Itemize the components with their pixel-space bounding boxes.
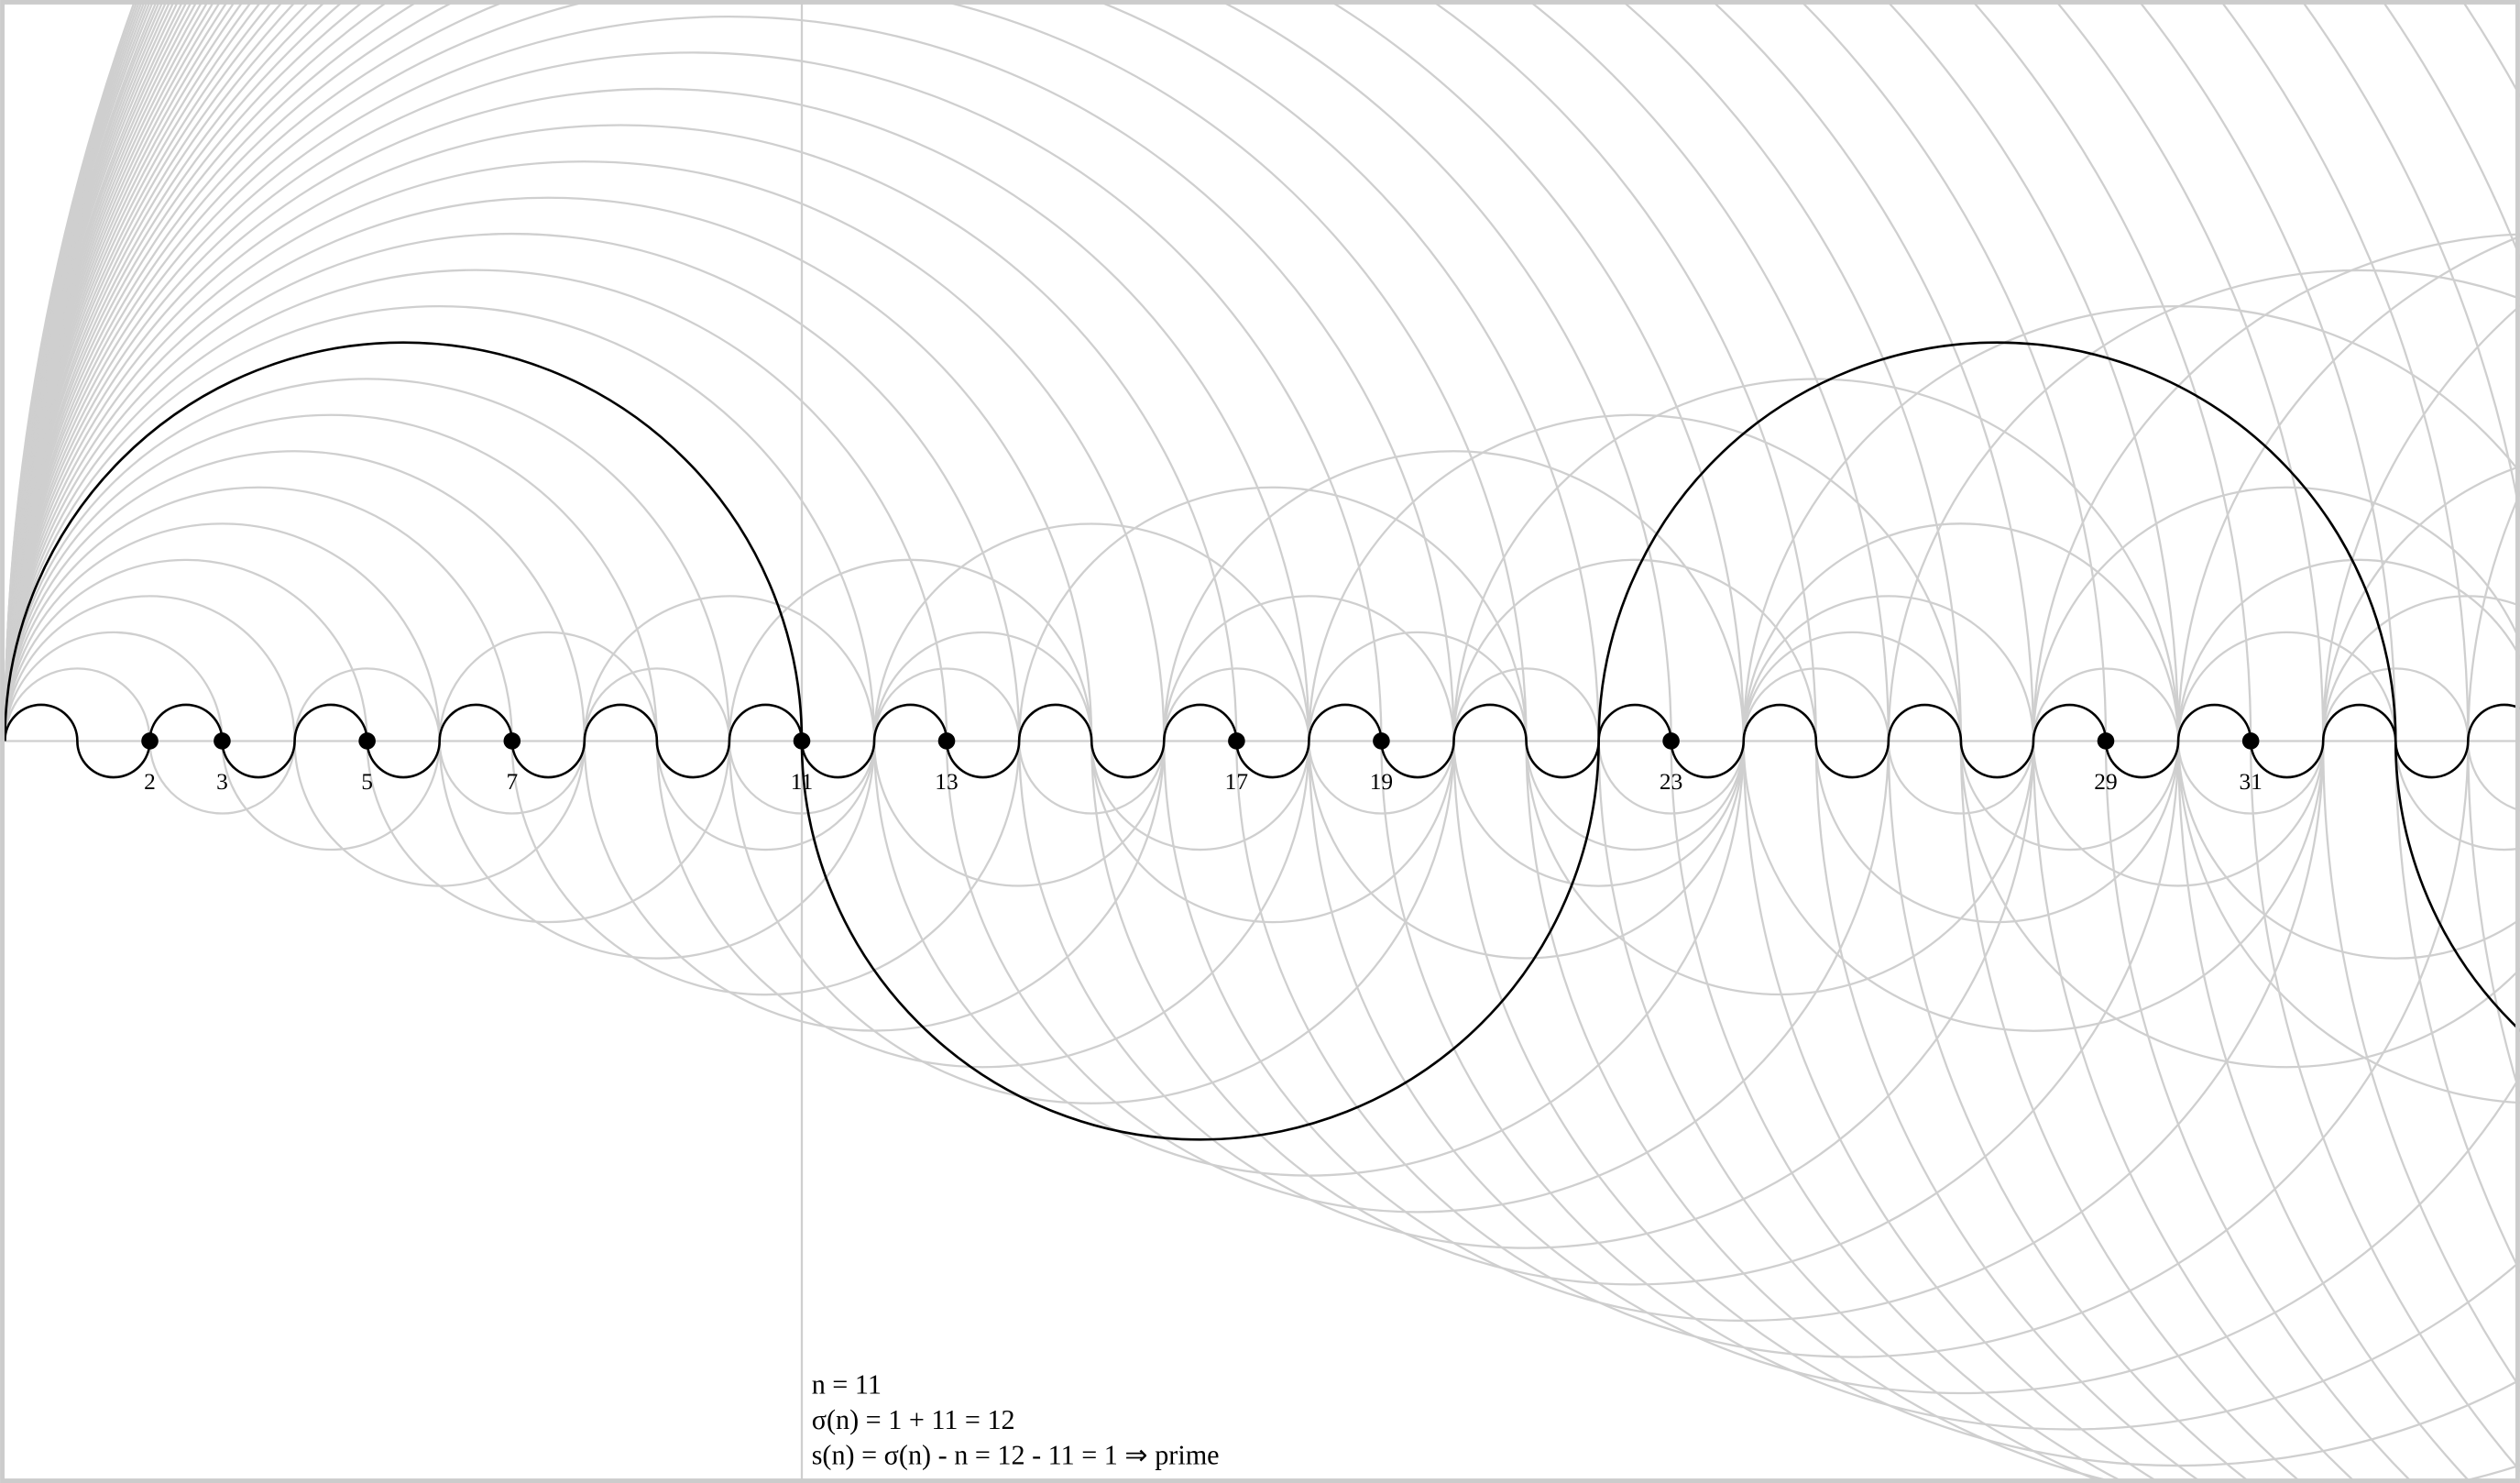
prime labels: 17 <box>1225 769 1248 795</box>
prime labels: 3 <box>216 769 228 795</box>
prime labels: 23 <box>1660 769 1682 795</box>
prime labels: 19 <box>1370 769 1393 795</box>
info text block <box>812 1368 1220 1471</box>
vertical marker at n = 11 <box>801 0 803 1483</box>
prime labels: 7 <box>506 769 518 795</box>
black arcs for divisor 11 <box>5 343 2520 1139</box>
number line axis <box>0 740 2520 742</box>
black unit arcs <box>5 705 2520 777</box>
prime labels: 2 <box>144 769 156 795</box>
prime labels: 11 <box>791 769 813 795</box>
prime labels: 29 <box>2094 769 2118 795</box>
info text block: s(n) = σ(n) - n = 12 - 11 = 1 ⇒ prime <box>812 1440 1220 1471</box>
info text block: n = 11 <box>812 1368 882 1400</box>
prime labels <box>144 769 2263 795</box>
prime labels: 13 <box>935 769 959 795</box>
prime labels: 5 <box>361 769 373 795</box>
info text block: σ(n) = 1 + 11 = 12 <box>812 1404 1015 1435</box>
prime labels: 31 <box>2239 769 2263 795</box>
prime dots <box>141 732 2259 750</box>
